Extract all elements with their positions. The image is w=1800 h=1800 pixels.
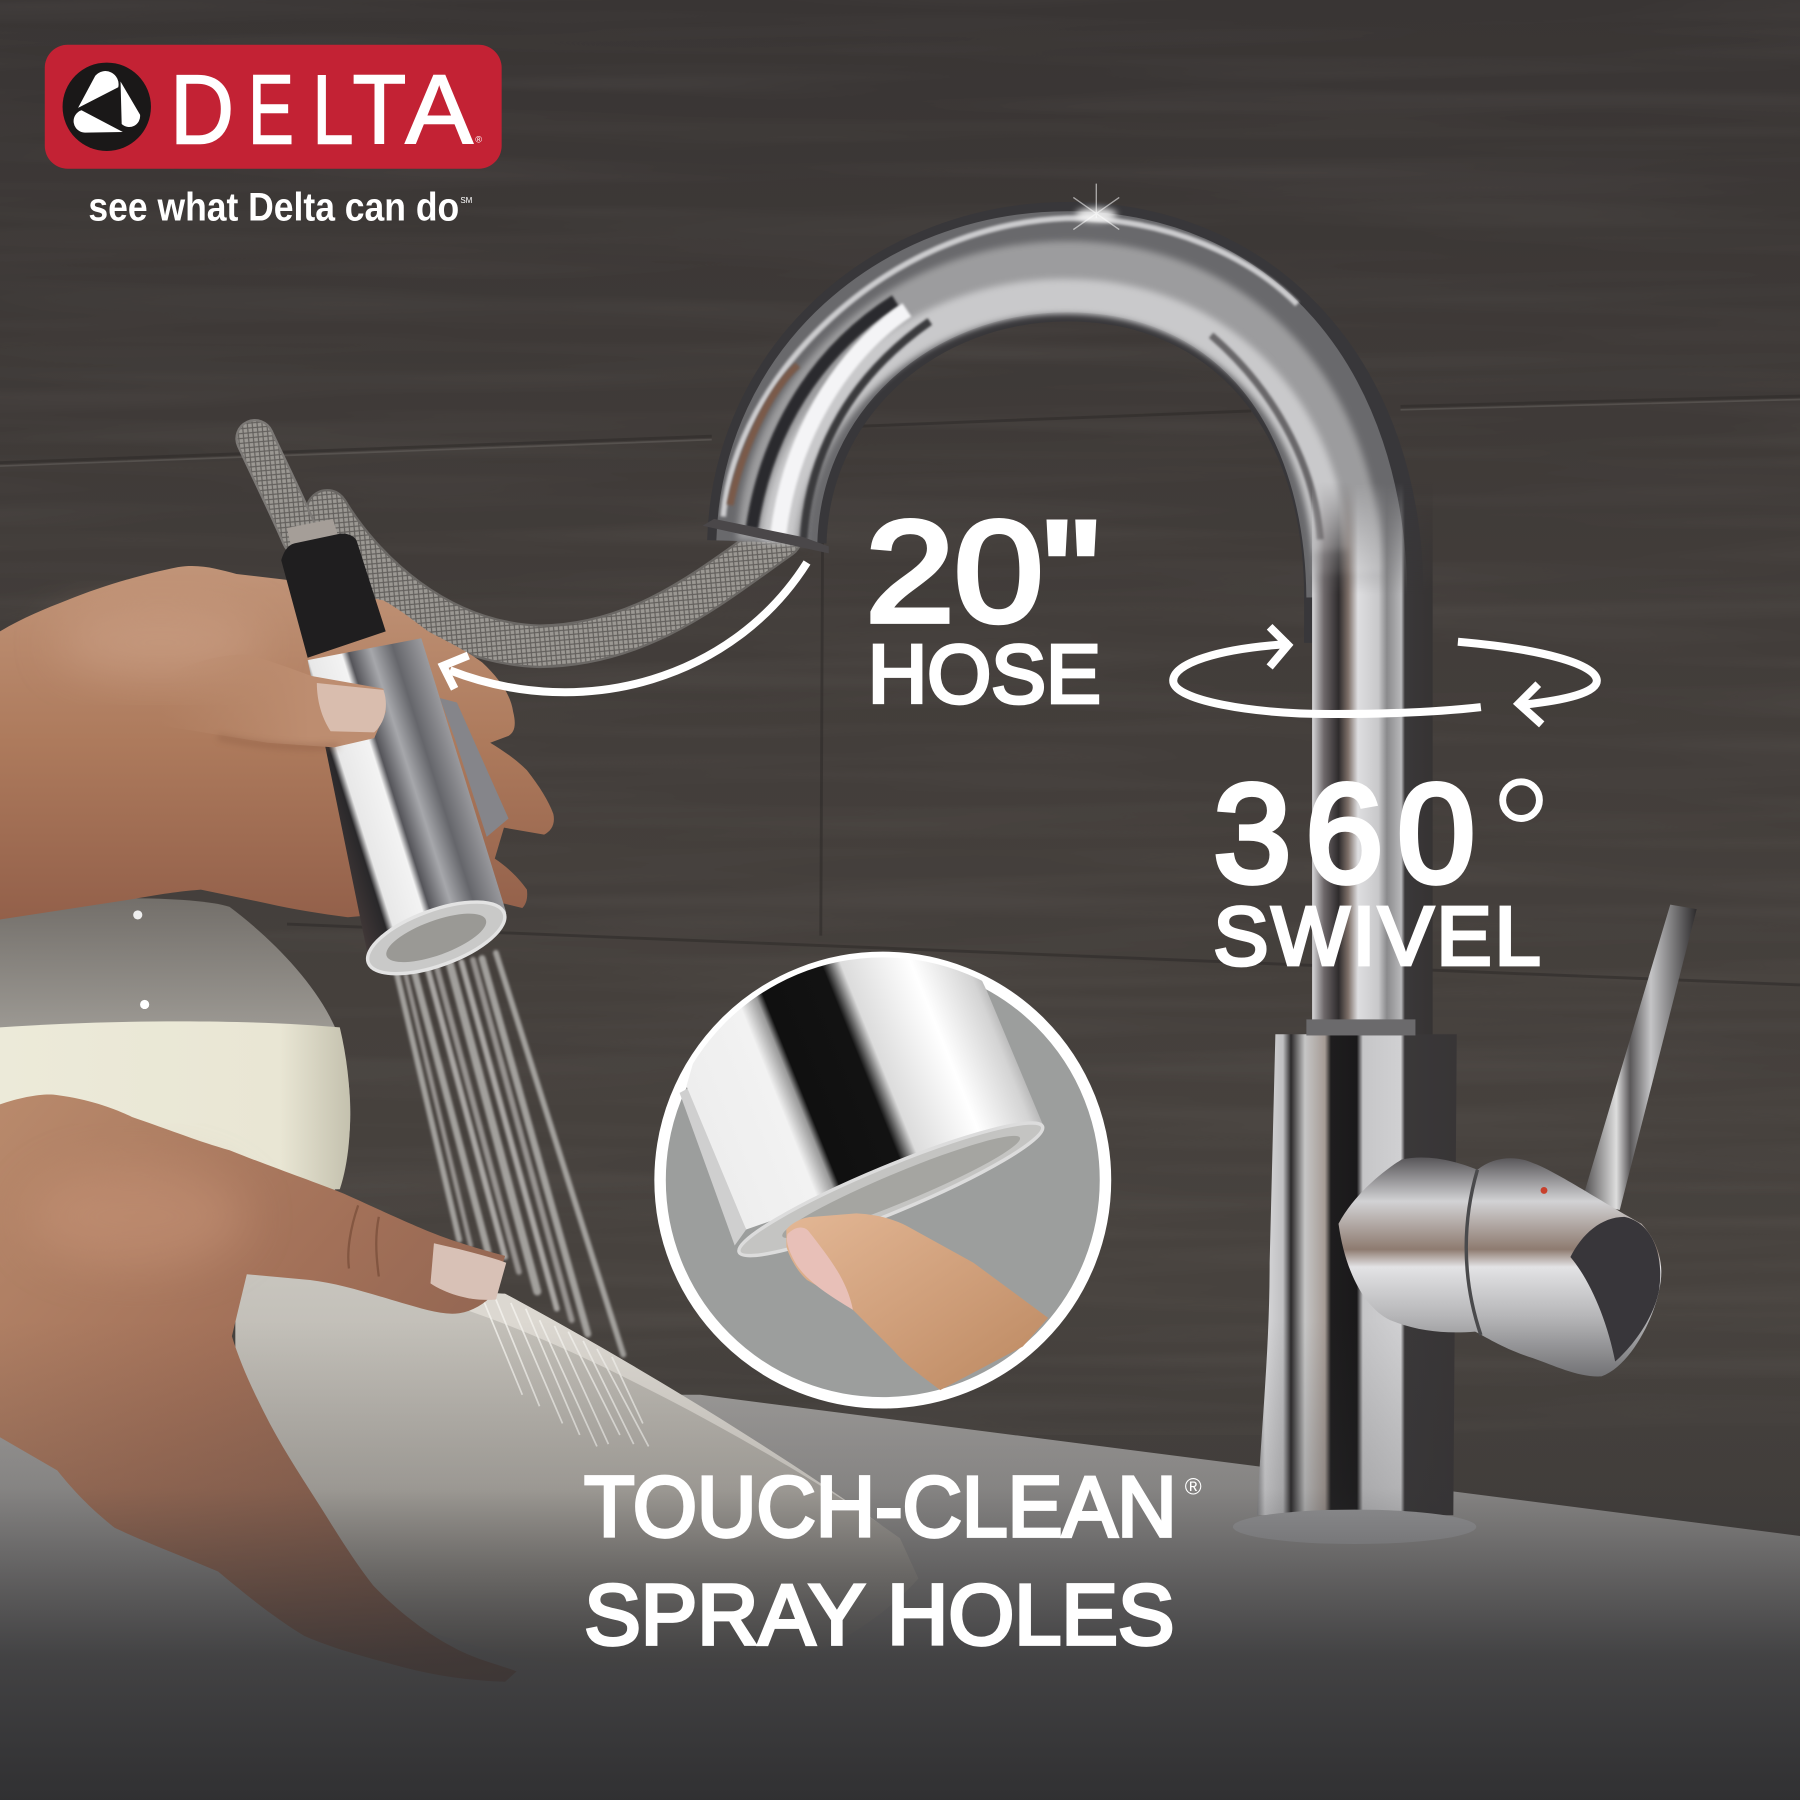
spout nozzle	[703, 519, 829, 553]
heading: touch-clean spray holes: ®	[1185, 1474, 1202, 1500]
thumb	[161, 654, 386, 747]
heading: touch-clean spray holes	[584, 1459, 1202, 1662]
heading: touch-clean spray holes: TOUCH-CLEAN	[584, 1459, 1177, 1554]
tagline: SM	[460, 196, 473, 205]
milk jug	[0, 898, 350, 1194]
fingernail	[787, 1228, 853, 1310]
heading: 20 inch hose: HOSE	[868, 628, 1101, 721]
wordmark: L	[312, 54, 354, 164]
wordmark	[170, 54, 473, 164]
arrow: hose length	[443, 562, 807, 692]
faucet mixer hub	[1339, 1157, 1661, 1376]
faucet lever handle	[1582, 905, 1697, 1210]
faucet spout	[723, 218, 1364, 643]
water spray	[396, 953, 623, 1355]
icon: Delta triangle mark	[63, 63, 151, 151]
tagline: see what Delta can do	[88, 184, 459, 229]
spout sparkle	[1073, 184, 1119, 230]
countertop	[0, 1395, 1800, 1800]
wordmark: T	[352, 54, 406, 164]
arrows: 360 swivel	[1173, 627, 1597, 724]
wordmark: D	[170, 54, 234, 164]
dish held under spray	[235, 1272, 918, 1671]
heading: touch-clean spray holes: SPRAY HOLES	[584, 1567, 1174, 1662]
heading: 20 inch hose	[866, 492, 1101, 721]
heading: 360 swivel	[1213, 755, 1541, 982]
wordmark: E	[248, 54, 294, 164]
sprayer	[281, 519, 514, 989]
nail: lower hand	[430, 1243, 506, 1300]
faucet vertical riser	[1312, 482, 1433, 1035]
faucet body	[1233, 1019, 1476, 1544]
finger	[786, 1213, 1048, 1390]
logo: Delta badge	[45, 45, 502, 169]
lever paddle on sprayer	[440, 698, 509, 837]
base plate	[1233, 1510, 1476, 1544]
hose	[255, 439, 781, 646]
upper hand behind sprayer	[0, 566, 554, 920]
bottom dark fade	[0, 1320, 1800, 1800]
heading: 360 swivel: 360	[1213, 755, 1475, 912]
heading: 360 swivel: SWIVEL	[1213, 889, 1541, 982]
inset: touch-clean spray head	[660, 918, 1105, 1403]
wordmark: A	[405, 54, 473, 164]
lower hand	[0, 1094, 517, 1682]
heading: 20 inch hose: 20"	[866, 492, 1100, 652]
logo: Delta badge: ®	[475, 134, 482, 144]
